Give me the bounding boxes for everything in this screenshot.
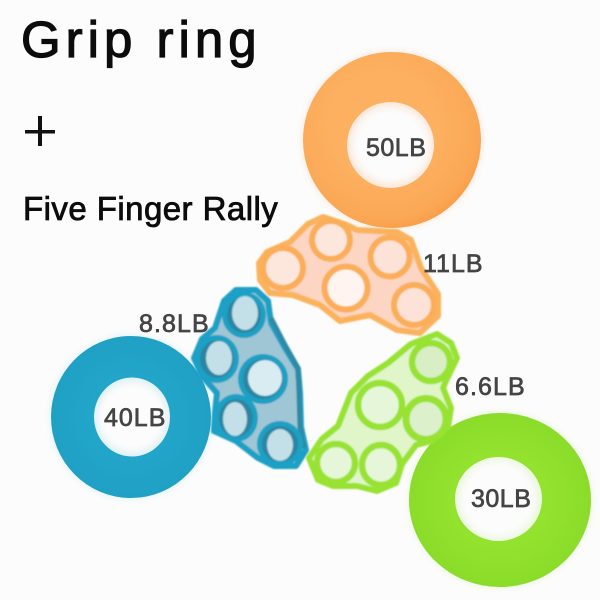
blue ring label: 40LB (104, 404, 166, 432)
orange band label: 11LB (423, 250, 484, 278)
orange finger band (259, 217, 484, 333)
green ring label: 30LB (471, 485, 531, 513)
orange grip ring (303, 52, 481, 228)
orange ring label: 50LB (366, 134, 426, 162)
green finger band (309, 334, 526, 491)
title: Grip ring (21, 11, 262, 68)
green grip ring (409, 413, 591, 587)
plus sign (25, 116, 55, 146)
green band label: 6.6LB (455, 373, 526, 401)
blue grip ring (51, 336, 211, 498)
blue finger band (139, 290, 306, 467)
blue band label: 8.8LB (139, 310, 210, 338)
subtitle: Five Finger Rally (23, 190, 278, 227)
